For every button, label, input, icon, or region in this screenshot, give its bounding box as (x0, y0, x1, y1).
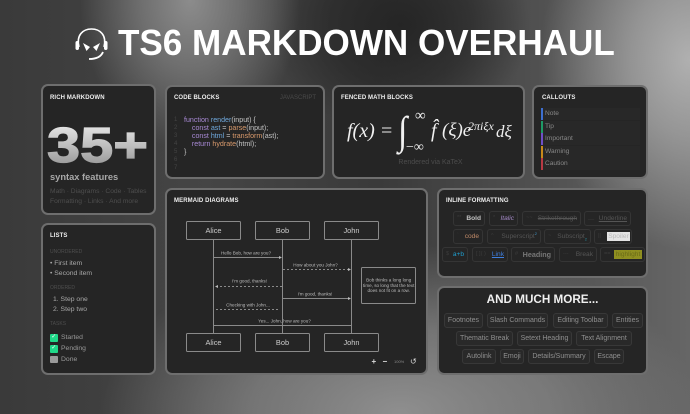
zoom controls: − (382, 357, 387, 366)
task list: Pending (61, 345, 86, 352)
feature list: Math · Diagrams · Code · Tables (50, 188, 147, 194)
chip: spoiler: || (598, 233, 601, 239)
sequence diagram (186, 221, 416, 352)
chip: italic (489, 211, 518, 226)
line numbers: 1 (174, 116, 177, 122)
tag: emoji: Emoji (503, 353, 521, 360)
line numbers: 4 (174, 140, 177, 146)
unordered list: • First item (50, 260, 82, 267)
heading: inline formatting: INLINE FORMATTING (446, 198, 509, 204)
ordered list: 2. Step two (53, 306, 87, 313)
tag: thematic break: Thematic Break (460, 335, 509, 342)
callout: tip: Tip (545, 122, 554, 130)
chip: italic: * (493, 215, 495, 221)
callout: note (541, 108, 640, 120)
formula: f(x) (347, 120, 375, 142)
sequence diagram: Alice (205, 226, 222, 235)
tag: autolink: Autolink (467, 353, 491, 360)
formula: = (381, 120, 392, 142)
chip: code: ` (457, 233, 459, 239)
tag: escape (594, 349, 624, 364)
chip: heading: # (515, 251, 518, 257)
heading: lists: LISTS (50, 233, 68, 239)
heading: fenced math: FENCED MATH BLOCKS (341, 95, 413, 101)
formula: ∞ (415, 108, 426, 124)
tag: setext heading: Setext Heading (521, 335, 568, 342)
chip: spoiler (594, 229, 632, 244)
chip: underline (584, 211, 631, 226)
chip: code (453, 229, 483, 244)
chip: heading: Heading (523, 250, 551, 259)
tag: slash commands: Slash Commands (490, 317, 545, 324)
sequence diagram: Alice (205, 338, 222, 347)
tag: details/summary (528, 349, 590, 364)
code sample (184, 116, 279, 156)
tag: footnotes (444, 313, 483, 328)
sequence diagram: John (343, 226, 360, 235)
chip: link: [ ]( ) (476, 251, 486, 257)
formula (347, 108, 512, 155)
line numbers: 7 (174, 164, 177, 170)
callout: tip (541, 120, 640, 132)
chip: strikethrough: Strikethrough (538, 215, 577, 222)
tag: emoji (500, 349, 524, 364)
sequence diagram: John (343, 338, 360, 347)
chip: subscript: Subscript2 (557, 233, 587, 241)
formula: ∫ (398, 108, 407, 153)
heading: rich markdown: RICH MARKDOWN (50, 95, 105, 101)
chip: italic: Italic (500, 215, 514, 222)
formula: −∞ (406, 140, 424, 155)
chip: strikethrough: ~~ (526, 215, 532, 221)
code sample: const ast = parse(input); (192, 124, 268, 132)
panel: code blocks (165, 85, 325, 179)
tag: slash commands (487, 313, 548, 328)
sequence diagram: Bob thinks a long long (366, 278, 412, 282)
ordered list: 1. Step one (53, 296, 88, 303)
chip: subscript (544, 229, 591, 244)
unordered list: UNORDERED (50, 249, 82, 255)
chip: math: a+b (453, 251, 464, 258)
panel: lists (41, 223, 156, 375)
unordered list: • Second item (50, 270, 92, 277)
tag: setext heading (517, 331, 572, 346)
sequence diagram: Hello Bob, how are you? (221, 250, 271, 256)
chip: highlight (600, 247, 645, 262)
chip: break: Break (576, 251, 593, 258)
sequence diagram: time, so long that the text (363, 283, 415, 288)
chip: link (472, 247, 508, 262)
chip: code: code (465, 233, 479, 240)
chip: highlight: == (604, 251, 610, 257)
chip: bold (453, 211, 485, 226)
tag: editing toolbar (553, 313, 608, 328)
chip: superscript (487, 229, 541, 244)
tag: footnotes: Footnotes (448, 317, 479, 324)
sequence diagram: I'm good, thanks! (298, 292, 332, 296)
panel: and much more (437, 286, 648, 375)
sequence diagram: I'm good, thanks! (232, 278, 267, 284)
tag: escape: Escape (597, 353, 621, 360)
chip: underline: Underline (599, 215, 627, 222)
task list: Started (61, 334, 83, 341)
task list: ✓ (51, 345, 56, 351)
callout: warning: Warning (545, 148, 569, 154)
sequence diagram: Bob (276, 338, 289, 347)
task list: TASKS (50, 321, 66, 327)
zoom controls: ↺ (410, 357, 417, 366)
zoom controls: + (372, 357, 376, 366)
chip: link: Link (492, 251, 504, 258)
unordered list (50, 249, 92, 277)
heading: and much more: AND MUCH MORE... (487, 293, 598, 306)
chip: strikethrough (522, 211, 581, 226)
icon: headset logo (76, 28, 108, 60)
chip: subscript: ~ (548, 233, 551, 239)
sequence diagram: does not fit on a row. (367, 288, 410, 293)
language label: JAVASCRIPT (280, 95, 316, 101)
zoom controls: 100% (394, 359, 404, 364)
chip: bold: Bold (466, 215, 481, 222)
subtitle: syntax features (50, 172, 118, 182)
chip: math: $ (446, 251, 449, 257)
task list: ✓ (51, 334, 56, 340)
callout: caution (541, 158, 640, 170)
code sample: const html = transform(ast); (192, 132, 279, 140)
sequence diagram: How about you John? (293, 262, 338, 268)
callout: note: Note (545, 110, 559, 117)
zoom controls (372, 357, 417, 366)
chip: superscript: Superscript2 (501, 231, 537, 240)
heading: mermaid: MERMAID DIAGRAMS (174, 198, 239, 204)
sequence diagram: Checking with John... (226, 302, 270, 308)
chip: break: --- (563, 251, 568, 257)
callout: important: Important (545, 135, 573, 142)
line numbers: 5 (174, 148, 177, 154)
tag: autolink (462, 349, 496, 364)
line numbers: 2 (174, 124, 177, 130)
callout: warning (541, 146, 640, 158)
chip: highlight: highlight (616, 251, 640, 258)
chip: math (442, 247, 468, 262)
line numbers: 3 (174, 132, 177, 138)
sequence diagram: Bob (276, 226, 289, 235)
panel: inline formatting (437, 188, 648, 278)
formula: f̂ (431, 120, 437, 142)
line numbers: 6 (174, 156, 177, 162)
formula: 2πiξx (468, 119, 494, 133)
tag: editing toolbar: Editing Toolbar (557, 317, 604, 324)
title: TS6 MARKDOWN OVERHAUL (118, 22, 615, 63)
ordered list: ORDERED (50, 285, 75, 291)
feature list (50, 188, 147, 204)
callout: caution: Caution (545, 160, 568, 167)
feature list: Formatting · Links · And more (50, 198, 138, 204)
ordered list (50, 285, 88, 313)
caption: Rendered via KaTeX (398, 158, 463, 166)
chip: spoiler: Spoiler (608, 233, 629, 240)
heading: code blocks: CODE BLOCKS (174, 95, 219, 101)
tag: entities: Entities (616, 317, 639, 324)
tag: entities (612, 313, 643, 328)
tag: details/summary: Details/Summary (532, 353, 586, 360)
formula: dξ (496, 122, 512, 141)
chip: break (559, 247, 597, 262)
task list: Done (61, 356, 77, 362)
chip: superscript: ^ (491, 233, 494, 239)
code sample: function render(input) { (184, 116, 256, 124)
tag: text alignment (576, 331, 632, 346)
tag: text alignment: Text Alignment (581, 335, 627, 342)
formula: (ξ)e (442, 120, 471, 141)
heading: callouts: CALLOUTS (542, 95, 575, 101)
tag: thematic break (456, 331, 513, 346)
chip: bold: ** (457, 215, 461, 221)
chip: underline: __ (588, 215, 594, 221)
callout: important (541, 133, 640, 145)
panel: callouts (532, 85, 648, 179)
line numbers (174, 116, 178, 170)
panel: rich markdown (41, 84, 156, 215)
code sample: } (184, 148, 186, 156)
panel: fenced math blocks (332, 85, 525, 179)
task list (50, 321, 86, 363)
chip: heading (511, 247, 555, 262)
sequence diagram: Yes... John, how are you? (258, 318, 311, 324)
panel: mermaid diagrams (165, 188, 428, 375)
code sample: return hydrate(html); (192, 140, 256, 148)
